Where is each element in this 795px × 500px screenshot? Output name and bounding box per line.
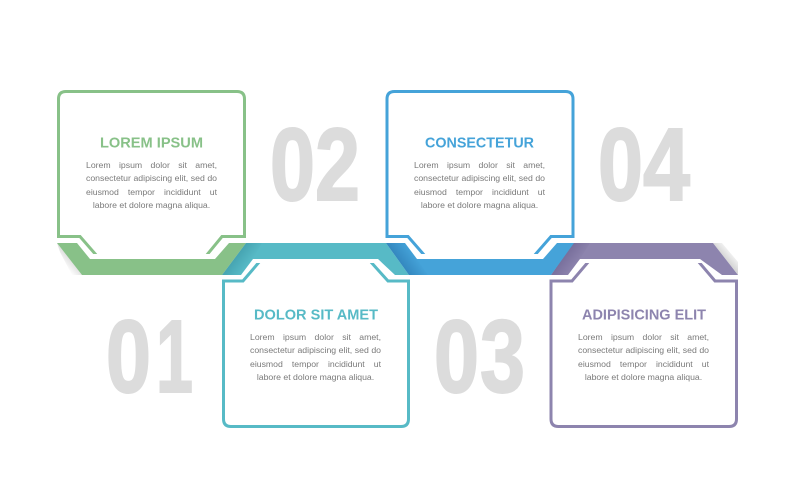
- infographic graphics: [57, 90, 738, 428]
- band: purple: [551, 243, 738, 275]
- heading: consectetur: CONSECTETUR: [425, 134, 534, 152]
- card outline: green: [58, 92, 244, 256]
- fold shadow: purple over blue: [551, 243, 590, 275]
- number 04: 4: [643, 107, 690, 222]
- body text: card 3: eiusmod tempor incididunt ut: [414, 187, 545, 197]
- heading: lorem ipsum: LOREM IPSUM: [100, 134, 203, 152]
- card outline: purple: [551, 261, 736, 426]
- heading: dolor sit amet: DOLOR SIT AMET: [254, 306, 378, 324]
- outer shadow: left of green band: [57, 243, 82, 275]
- number 01: 0: [106, 299, 151, 414]
- heading: adipisicing elit: ADIPISICING ELIT: [582, 306, 706, 324]
- body text: card 3: labore et dolore magna aliqua.: [421, 200, 538, 210]
- outer shadow: right of purple band: [713, 243, 738, 275]
- body text: card 4: labore et dolore magna aliqua.: [585, 372, 702, 382]
- number 01: [106, 299, 193, 414]
- body text: card 4: [578, 332, 709, 382]
- body text: card 1: [86, 160, 217, 210]
- body text: card 1: Lorem ipsum dolor sit amet,: [86, 160, 217, 170]
- card outline: blue: [387, 92, 573, 256]
- body text: card 3: consectetur adipiscing elit, sed do: [414, 173, 545, 183]
- body text: card 2: [250, 332, 381, 382]
- body text: card 1: eiusmod tempor incididunt ut: [86, 187, 217, 197]
- fold shadow: teal over green: [222, 243, 262, 275]
- number 04: [598, 107, 690, 222]
- body text: card 4: consectetur adipiscing elit, sed do: [578, 345, 709, 355]
- fold shadow: blue over teal: [386, 243, 428, 275]
- number 01: 1: [156, 299, 193, 414]
- number 03: [434, 299, 525, 414]
- number 04: 0: [598, 107, 643, 222]
- body text: card 3: Lorem ipsum dolor sit amet,: [414, 160, 545, 170]
- body text: card 2: eiusmod tempor incididunt ut: [250, 359, 381, 369]
- number 02: 2: [315, 107, 360, 222]
- number 03: 3: [480, 299, 525, 414]
- number 03: 0: [434, 299, 479, 414]
- band: teal: [222, 243, 409, 275]
- body text: card 2: labore et dolore magna aliqua.: [257, 372, 374, 382]
- body text: card 3: [414, 160, 545, 210]
- body text: card 1: labore et dolore magna aliqua.: [93, 200, 210, 210]
- card outline: teal: [224, 261, 408, 426]
- number 02: [270, 107, 360, 222]
- body text: card 2: consectetur adipiscing elit, sed do: [250, 345, 381, 355]
- body text: card 4: Lorem ipsum dolor sit amet,: [578, 332, 709, 342]
- band: blue: [386, 243, 574, 275]
- body text: card 4: eiusmod tempor incididunt ut: [578, 359, 709, 369]
- body text: card 1: consectetur adipiscing elit, sed do: [86, 173, 217, 183]
- number 02: 0: [270, 107, 315, 222]
- band: green: [57, 243, 246, 275]
- body text: card 2: Lorem ipsum dolor sit amet,: [250, 332, 381, 342]
